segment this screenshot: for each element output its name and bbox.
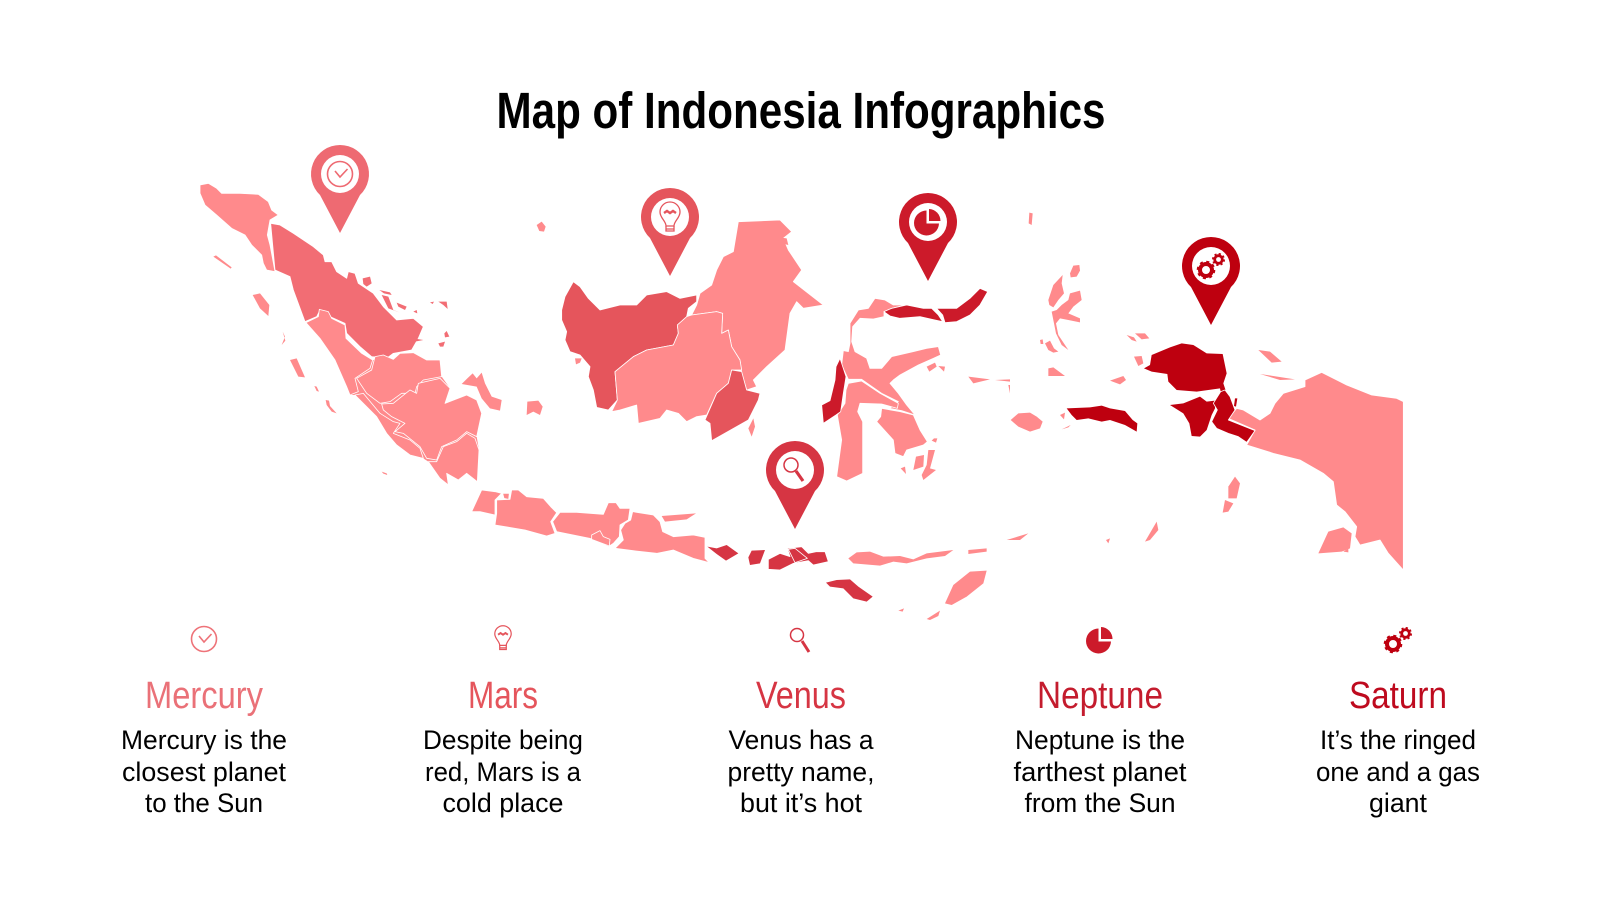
- column: Mercury: [121, 626, 287, 818]
- icon: check circle: [192, 626, 216, 652]
- heading: Mars: Mars: [468, 675, 538, 717]
- icon: gears in pin: [1198, 254, 1224, 278]
- text: Venus description: but it’s hot: [740, 788, 862, 818]
- map of Indonesia: [200, 183, 1403, 620]
- map region: Sumatra: [200, 183, 546, 485]
- heading: Saturn: Saturn: [1349, 675, 1447, 717]
- text: Venus description: [728, 725, 874, 818]
- icon: pie chart in pin: [914, 209, 940, 236]
- map region: Kalimantan: [562, 220, 823, 441]
- title: Map of Indonesia Infographics: [496, 82, 1106, 139]
- text: Neptune description: [1014, 725, 1187, 818]
- icon: gears: [1385, 628, 1411, 652]
- text: Mercury description: Mercury is the: [121, 725, 287, 755]
- text: Mars description: [423, 725, 583, 818]
- pin: Saturn: [1182, 237, 1240, 325]
- text: Venus description: Venus has a: [728, 725, 874, 755]
- pin: Venus: [766, 441, 824, 529]
- text: Neptune description: Neptune is the: [1015, 725, 1185, 755]
- column: Venus: [728, 628, 874, 818]
- text: Saturn description: one and a gas: [1316, 757, 1480, 787]
- column: Neptune: [1014, 627, 1187, 818]
- text: Saturn description: It’s the ringed: [1320, 725, 1476, 755]
- text: Mercury description: [121, 725, 287, 818]
- heading: Mercury: Mercury: [145, 675, 263, 717]
- icon: light bulb in pin: [660, 202, 680, 231]
- text: Neptune description: farthest planet: [1014, 757, 1187, 787]
- heading: Neptune: Neptune: [1037, 675, 1163, 717]
- pin: Neptune: [899, 193, 957, 281]
- column: Saturn: [1316, 628, 1480, 818]
- icon: pie chart: [1086, 627, 1112, 654]
- text: Neptune description: from the Sun: [1024, 788, 1176, 818]
- map region: Papua: [1007, 213, 1403, 570]
- map region: Maluku: [1011, 265, 1227, 437]
- text: Mars description: red, Mars is a: [425, 757, 582, 787]
- map region: Sulawesi: [822, 288, 1010, 481]
- text: Saturn description: giant: [1369, 788, 1427, 818]
- icon: magnifier: [790, 628, 809, 652]
- text: Mars description: Despite being: [423, 725, 583, 755]
- icon: light bulb: [495, 626, 511, 649]
- pin: Mercury: [311, 145, 369, 233]
- pin: Mars: [641, 188, 699, 276]
- text: Saturn description: [1316, 725, 1480, 818]
- map region: Lesser Sunda: [707, 545, 987, 620]
- heading: Venus: Venus: [756, 675, 846, 717]
- text: Mercury description: closest planet: [122, 757, 286, 787]
- text: Venus description: pretty name,: [728, 757, 874, 787]
- icon: magnifier in pin: [784, 458, 803, 481]
- column: Mars: [423, 626, 583, 818]
- icon: check circle in pin: [328, 162, 352, 186]
- map region: Java: [472, 490, 709, 563]
- text: Mercury description: to the Sun: [145, 788, 263, 818]
- text: Mars description: cold place: [442, 788, 564, 818]
